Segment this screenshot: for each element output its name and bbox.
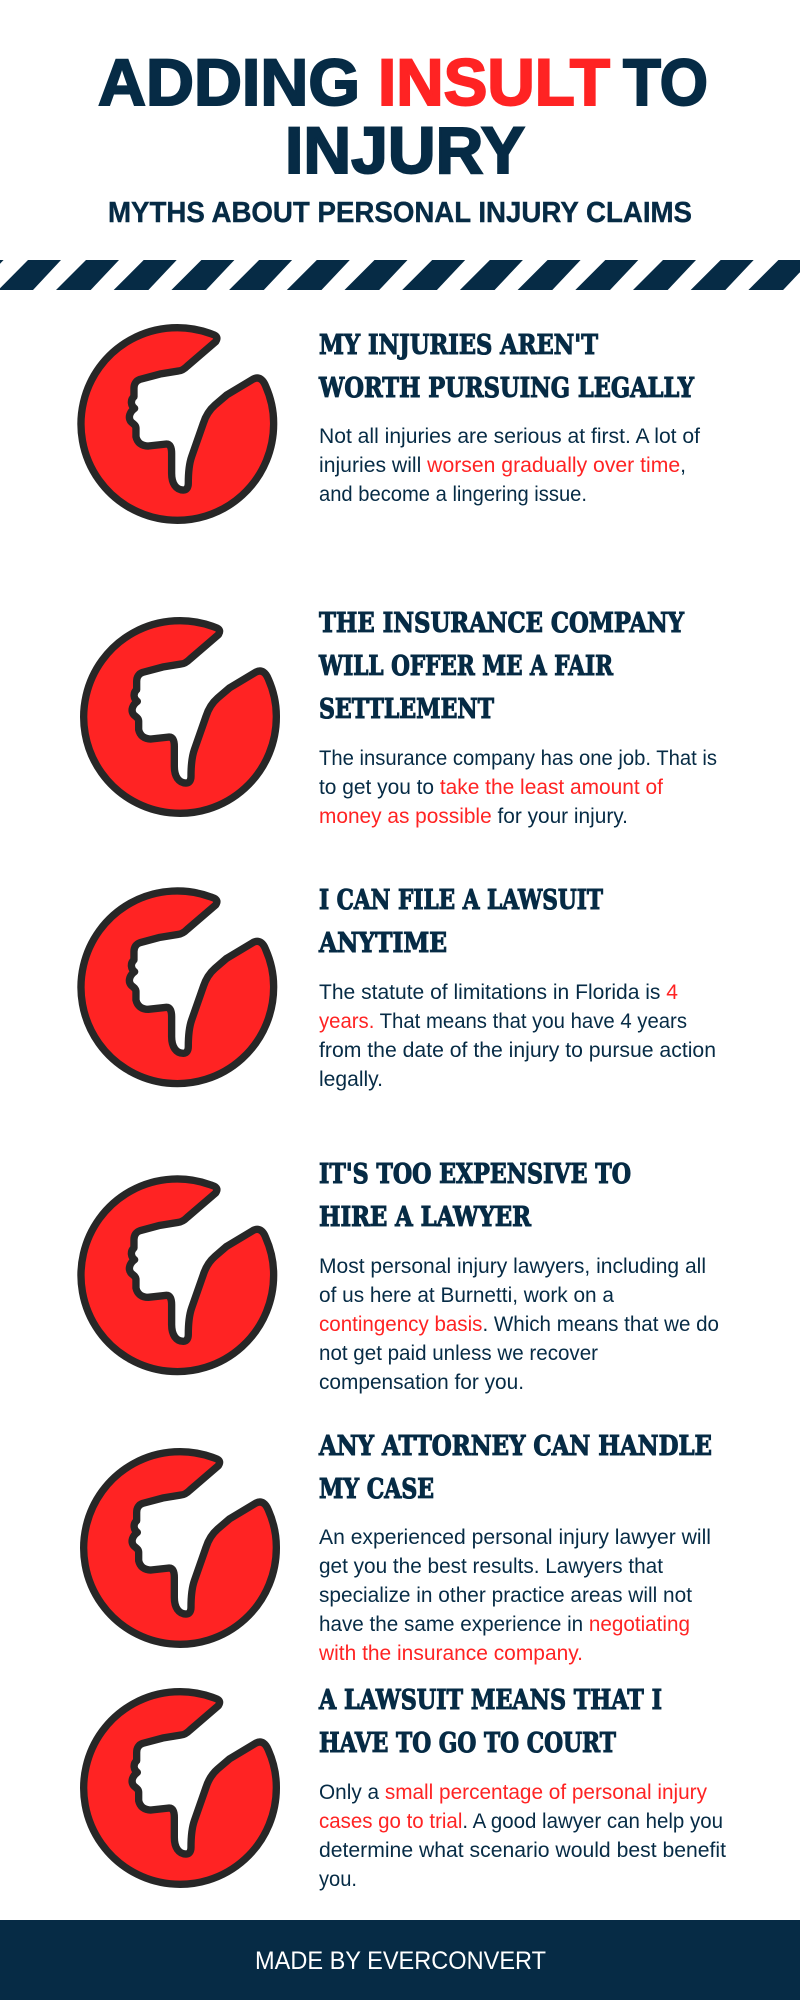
text block: The statute of limitations in Florida is 4 bbox=[319, 981, 678, 1004]
text block bbox=[319, 1255, 719, 1394]
heading: THE INSURANCE COMPANY bbox=[319, 607, 684, 639]
text block: The insurance company has one job. That is bbox=[319, 747, 717, 770]
heading bbox=[318, 329, 694, 404]
icon: thumbs down 4 bbox=[81, 1179, 274, 1372]
heading bbox=[318, 607, 684, 725]
heading: WORTH PURSUING LEGALLY bbox=[318, 372, 694, 404]
footer: MADE BY EVERCONVERT bbox=[255, 1947, 546, 1975]
text block: money as possible for your injury. bbox=[319, 805, 628, 828]
icon: thumbs down 2 bbox=[84, 621, 276, 813]
heading bbox=[318, 1684, 662, 1759]
text block: to get you to take the least amount of bbox=[319, 776, 663, 799]
text block: and become a lingering issue. bbox=[319, 483, 587, 506]
heading bbox=[319, 1158, 631, 1233]
panel: myth 2 bbox=[84, 607, 717, 828]
text block: from the date of the injury to pursue action bbox=[319, 1039, 716, 1062]
title bbox=[98, 45, 708, 187]
title: ADDING bbox=[98, 45, 360, 119]
text block bbox=[319, 747, 717, 828]
text block: Not all injuries are serious at first. A lot of bbox=[319, 425, 700, 448]
title: INJURY bbox=[285, 113, 525, 187]
text block: get you the best results. Lawyers that bbox=[319, 1555, 663, 1578]
text block: not get paid unless we recover bbox=[319, 1342, 598, 1365]
heading: I CAN FILE A LAWSUIT bbox=[319, 884, 603, 916]
icon: thumbs down 5 bbox=[84, 1452, 276, 1644]
text block: compensation for you. bbox=[319, 1371, 524, 1394]
text block: determine what scenario would best benefit bbox=[319, 1839, 726, 1862]
footer bbox=[0, 1920, 800, 2000]
text block: An experienced personal injury lawyer will bbox=[319, 1526, 711, 1549]
text block: years. That means that you have 4 years bbox=[319, 1010, 687, 1033]
subtitle: MYTHS ABOUT PERSONAL INJURY CLAIMS bbox=[108, 197, 692, 229]
panel: myth 4 bbox=[81, 1158, 719, 1394]
text block: cases go to trial. A good lawyer can help you bbox=[319, 1810, 723, 1833]
title: INSULT bbox=[378, 45, 610, 119]
text block: with the insurance company. bbox=[318, 1642, 583, 1665]
heading: ANYTIME bbox=[318, 927, 447, 959]
heading: HAVE TO GO TO COURT bbox=[319, 1727, 616, 1759]
text block bbox=[318, 1526, 711, 1665]
text block: you. bbox=[319, 1868, 357, 1891]
text block: injuries will worsen gradually over time, bbox=[319, 454, 686, 477]
heading: ANY ATTORNEY CAN HANDLE bbox=[318, 1430, 712, 1462]
heading bbox=[318, 884, 603, 959]
text block bbox=[319, 981, 716, 1091]
heading: WILL OFFER ME A FAIR bbox=[318, 650, 614, 682]
icon: thumbs down 6 bbox=[84, 1692, 276, 1884]
text block: of us here at Burnetti, work on a bbox=[319, 1284, 614, 1307]
striped divider bbox=[0, 260, 800, 290]
heading: HIRE A LAWYER bbox=[319, 1201, 532, 1233]
text block: specialize in other practice areas will not bbox=[319, 1584, 692, 1607]
text block bbox=[319, 1781, 726, 1891]
heading: MY INJURIES AREN'T bbox=[319, 329, 598, 361]
panel: myth 1 bbox=[81, 328, 700, 520]
text block: Most personal injury lawyers, including all bbox=[319, 1255, 706, 1278]
title: TO bbox=[623, 45, 708, 119]
heading: IT'S TOO EXPENSIVE TO bbox=[319, 1158, 631, 1190]
panel: myth 3 bbox=[81, 884, 716, 1091]
text block: Only a small percentage of personal injury bbox=[319, 1781, 707, 1804]
text block: legally. bbox=[319, 1068, 383, 1091]
heading: A LAWSUIT MEANS THAT I bbox=[318, 1684, 662, 1716]
text block bbox=[319, 425, 700, 506]
heading bbox=[318, 1430, 712, 1505]
heading: MY CASE bbox=[319, 1473, 434, 1505]
icon: thumbs down 1 bbox=[81, 328, 274, 520]
panel: myth 5 bbox=[84, 1430, 712, 1665]
text block: contingency basis. Which means that we do bbox=[319, 1313, 719, 1336]
panel: myth 6 bbox=[84, 1684, 726, 1891]
text block: have the same experience in negotiating bbox=[319, 1613, 690, 1636]
heading: SETTLEMENT bbox=[319, 693, 494, 725]
icon: thumbs down 3 bbox=[81, 891, 274, 1084]
